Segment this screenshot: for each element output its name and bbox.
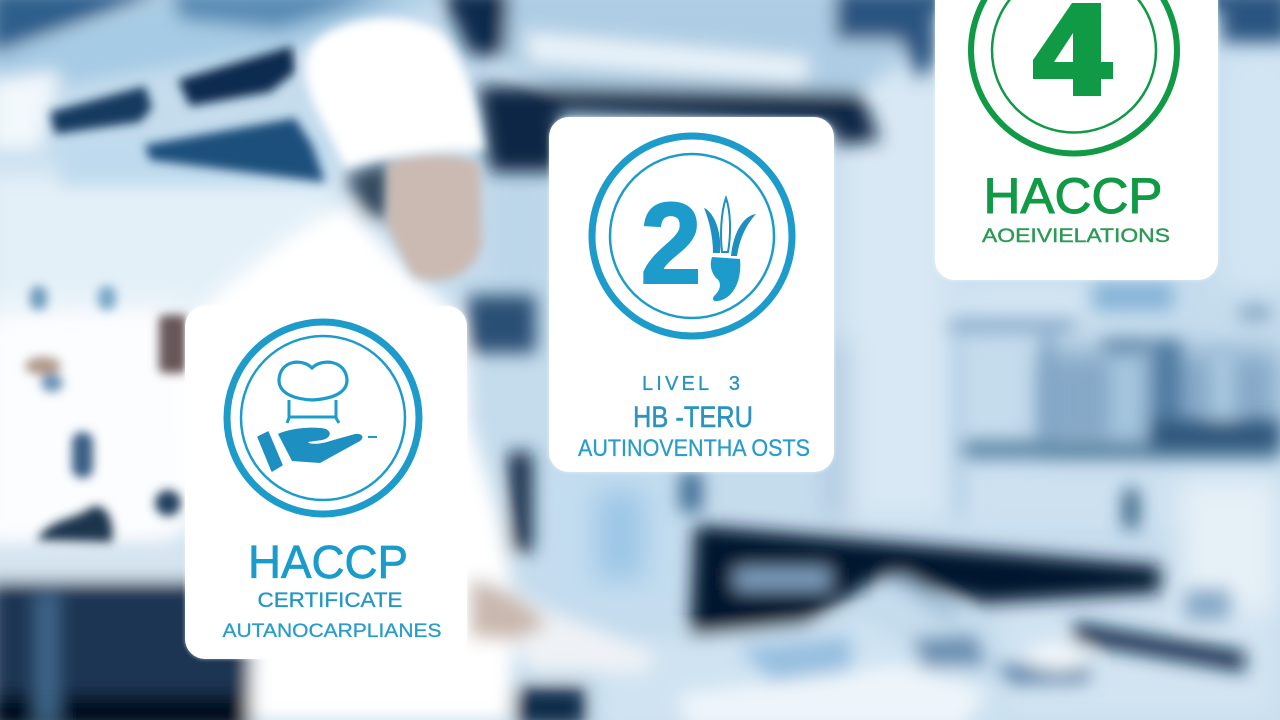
heading: HACCP: HACCP bbox=[248, 536, 408, 588]
panel: level card bbox=[549, 117, 834, 472]
icon: chef hat and hand in double ring bbox=[227, 322, 419, 514]
heading: HACCP: HACCP bbox=[984, 168, 1162, 224]
text: ABBREVIATIONS: AOEIVIELATIONS bbox=[982, 226, 1170, 247]
text: authorization line: AUTANOCARPLIANES bbox=[222, 621, 442, 642]
vents and hood bbox=[25, 18, 484, 542]
icon: number 4 in double ring bbox=[971, 0, 1177, 154]
text: HB-TERU: HB -TERU bbox=[633, 401, 753, 434]
icon: number 2 with brush in double ring bbox=[592, 136, 792, 336]
text: LEVEL 3: LIVEL 3 bbox=[642, 373, 740, 395]
text: authorization line: AUTINOVENTHA OSTS bbox=[578, 435, 810, 462]
card halos bbox=[184, 0, 1219, 660]
panel: HACCP certificate card bbox=[185, 306, 467, 659]
icon: number 2 with brush in double ring: 2 bbox=[640, 180, 702, 308]
text: CERTIFICATE: CERTIFICATE bbox=[258, 589, 402, 612]
panel: HACCP green card bbox=[935, 0, 1218, 280]
